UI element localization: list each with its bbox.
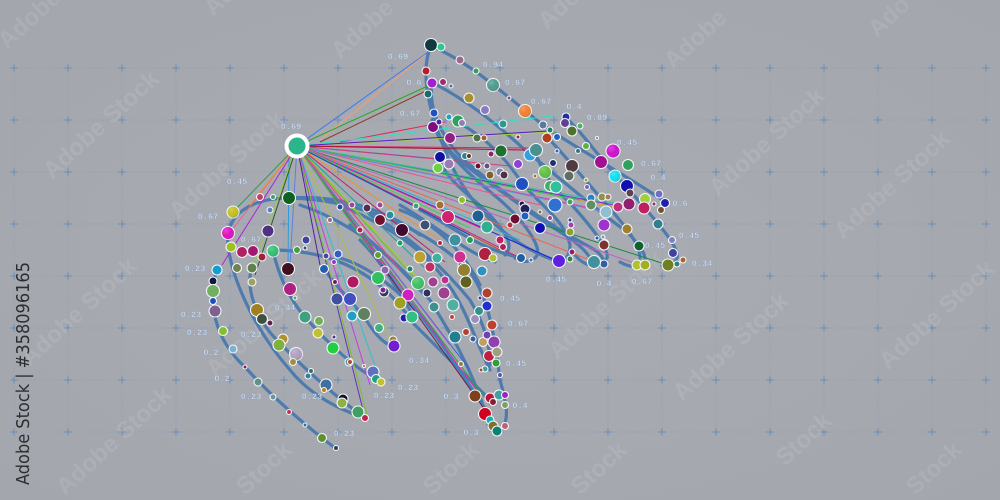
value labels: 0.34 (409, 356, 429, 366)
value labels: 0.6 (672, 199, 688, 209)
value labels: 0.2 (203, 348, 219, 358)
watermarks: Stock (418, 436, 485, 500)
value labels: 0.4 (566, 102, 582, 112)
connection lines from hub (222, 50, 668, 418)
value labels: 0.23 (398, 383, 418, 393)
value labels: 0.23 (334, 429, 354, 439)
watermarks: Adobe Stock (668, 287, 795, 406)
value labels: 0.34 (692, 259, 712, 269)
value labels: 0.67 (241, 235, 261, 245)
node highlight shading (222, 78, 621, 360)
value labels: 0.67 (400, 109, 420, 119)
value labels: 0.23 (185, 264, 205, 274)
value labels: 0.45 (546, 275, 566, 285)
value labels: 0.89 (587, 113, 607, 123)
watermarks: Adobe Stock (38, 65, 165, 184)
network arcs: lower cluster (212, 197, 522, 448)
value labels: 0.34 (275, 303, 295, 313)
network arcs: upper cluster (426, 46, 677, 266)
watermarks: Adobe Stock (874, 255, 1000, 374)
background grid with cross markers (10, 64, 990, 436)
value labels (181, 52, 712, 439)
value labels: 0.23 (374, 391, 394, 401)
value labels: 0.2 (214, 374, 230, 384)
watermarks: Stock (566, 436, 633, 500)
watermarks: Adobe Stock (16, 252, 143, 371)
value labels: 0.23 (241, 330, 261, 340)
value labels: 0.69 (388, 52, 408, 62)
value labels: 0.3 (443, 392, 459, 402)
value labels: 0.67 (508, 319, 528, 329)
value labels: 0.67 (531, 97, 551, 107)
value labels: 0.3 (463, 428, 479, 438)
watermarks: Adobe Stock (543, 245, 670, 364)
value labels: 0.67 (632, 277, 652, 287)
value labels: 0.45 (679, 231, 699, 241)
watermarks: Adobe Stock (201, 263, 328, 382)
watermarks: Adobe Stock (51, 381, 178, 500)
value labels: 0.23 (181, 310, 201, 320)
central hub node (286, 136, 308, 156)
value labels: 0.6 (406, 78, 422, 88)
value labels: 0.4 (512, 401, 528, 411)
watermarks: Adobe Stock (829, 125, 956, 244)
watermarks: Stock (231, 436, 298, 500)
value labels: 0.4 (650, 173, 666, 183)
value labels: 0.45 (227, 177, 247, 187)
value labels: 0.23 (302, 392, 322, 402)
watermarks: Stock (901, 436, 968, 500)
value labels: 0.23 (241, 392, 261, 402)
value labels: 0.67 (505, 78, 525, 88)
value labels: 0.4 (596, 279, 612, 289)
stock image credit: Adobe Stock | #358096165 (13, 262, 34, 485)
nodes: lower cluster (206, 192, 513, 450)
nodes: upper cluster (422, 38, 686, 271)
watermarks: Adobe Stock (164, 105, 291, 224)
value labels: 0.45 (506, 359, 526, 369)
value labels: 0.23 (187, 328, 207, 338)
watermarks: Stock (771, 407, 838, 471)
value labels: 0.69 (281, 122, 301, 132)
watermarks: Adobe Stock (704, 82, 831, 201)
value labels: 0.94 (483, 60, 503, 70)
watermarks: Adobe (659, 4, 732, 74)
value labels: 0.67 (641, 159, 661, 169)
value labels: 0.45 (500, 294, 520, 304)
value labels: 0.67 (198, 212, 218, 222)
value labels: 0.45 (645, 241, 665, 251)
value labels: 0.45 (617, 138, 637, 148)
